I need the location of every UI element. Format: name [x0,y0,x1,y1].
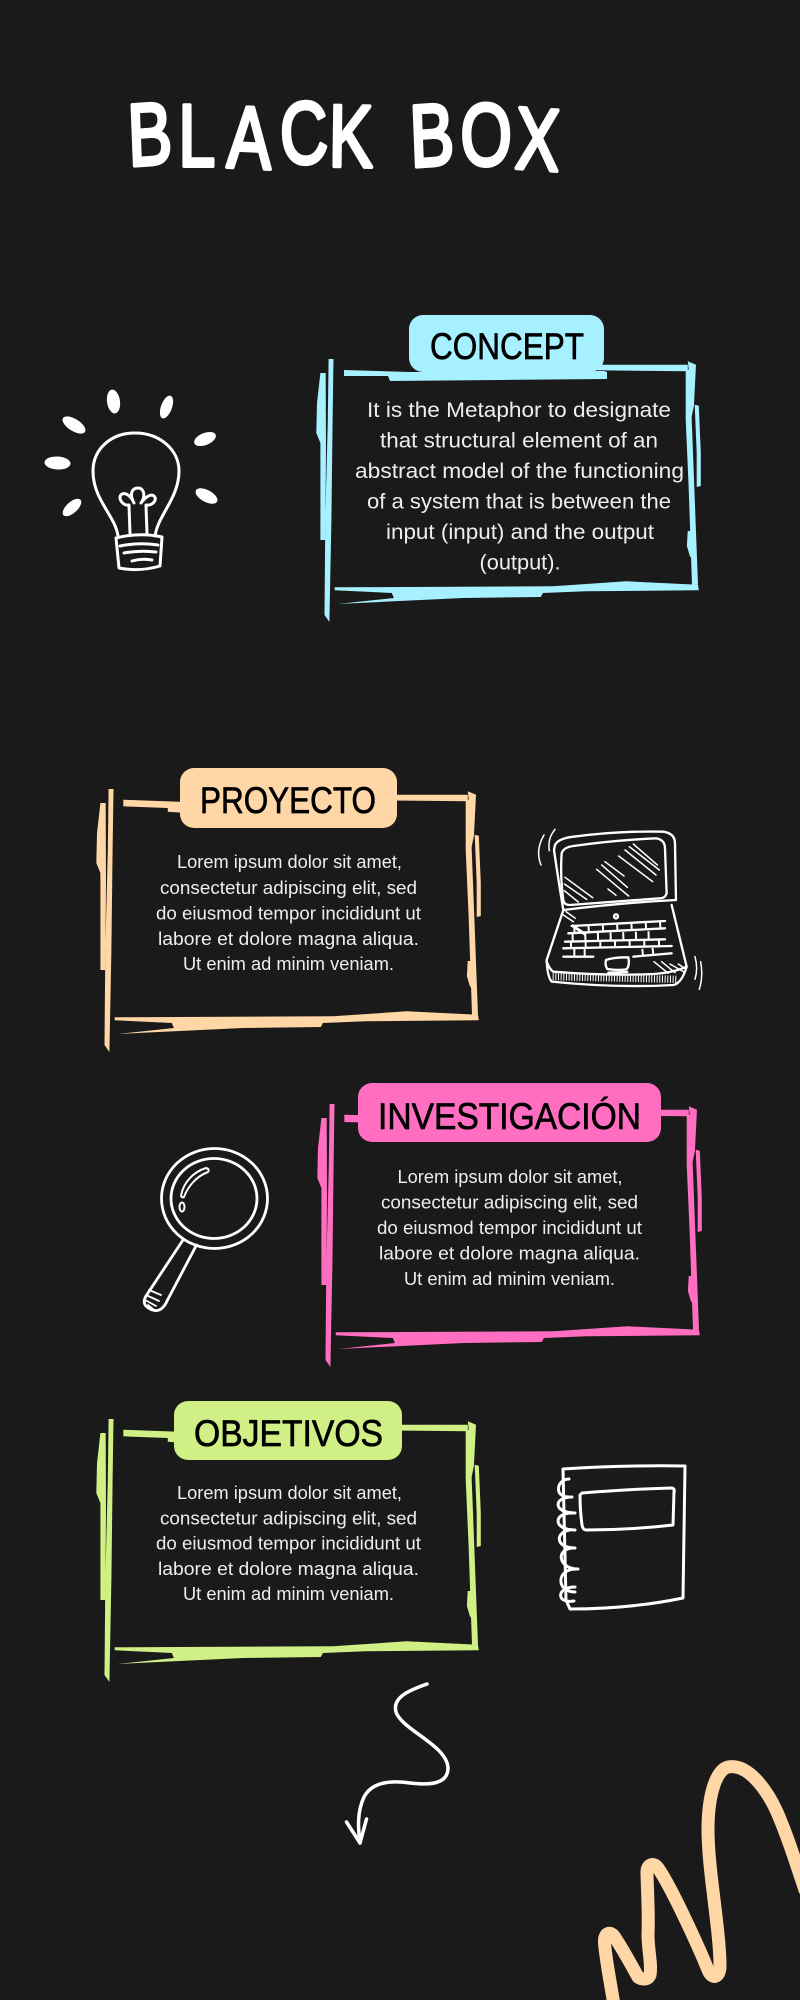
text block: objetivos: labore et dolore magna aliqua. [158,1559,419,1579]
text block: concept: input (input) and the output [386,521,654,544]
label: concept: CONCEPT [430,326,584,367]
icon: light bulb [44,389,220,570]
text block: concept: abstract model of the functioning [355,460,684,483]
text block: proyecto: labore et dolore magna aliqua. [158,929,419,949]
panel: objetivos [96,1401,685,1682]
text block: concept: that structural element of an [380,430,658,452]
text block: investigacion: Ut enim ad minim veniam. [404,1269,615,1289]
label: investigacion: INVESTIGACIÓN [378,1096,641,1137]
text block: investigacion: labore et dolore magna aliqua. [379,1244,640,1264]
label: proyecto: PROYECTO [200,780,376,821]
icon: notebook [558,1466,685,1609]
text block: concept [355,399,684,574]
arrow: squiggle pointing down [346,1684,448,1843]
frame: investigacion [317,1104,702,1367]
text block: proyecto [156,852,421,974]
text block: proyecto: Ut enim ad minim veniam. [183,954,394,974]
text block: proyecto: Lorem ipsum dolor sit amet, [177,852,402,872]
frame: concept [316,359,701,622]
icon: magnifying glass [144,1148,268,1311]
text block: objetivos: do eiusmod tempor incididunt ut [156,1534,421,1554]
icon: laptop [539,829,702,989]
label: concept [409,315,604,372]
frame: objetivos [96,1419,481,1682]
decoration: peach scribble [604,1767,800,2000]
text block: concept: of a system that is between the [367,490,671,514]
text block: proyecto: consectetur adipiscing elit, sed [160,878,417,898]
panel: concept [44,315,701,622]
text block: objetivos [156,1483,421,1604]
panel: proyecto [96,768,702,1052]
panel: investigacion [144,1083,702,1367]
text block: investigacion: Lorem ipsum dolor sit amet, [398,1167,622,1187]
frame: proyecto [96,789,481,1052]
title: BLACKBOX [126,84,562,190]
text block: proyecto: do eiusmod tempor incididunt ut [156,904,421,924]
text block: concept: It is the Metaphor to designate [367,399,671,422]
label: investigacion [358,1083,661,1142]
text block: investigacion [377,1167,642,1289]
text block: investigacion: do eiusmod tempor incididunt ut [377,1218,642,1238]
text block: objetivos: Ut enim ad minim veniam. [183,1584,394,1604]
text block: concept: (output). [480,552,560,574]
text block: objetivos: Lorem ipsum dolor sit amet, [177,1483,402,1503]
text block: objetivos: consectetur adipiscing elit, sed [160,1508,417,1528]
label: objetivos: OBJETIVOS [194,1413,383,1454]
label: objetivos [174,1401,402,1460]
label: proyecto [180,768,397,828]
text block: investigacion: consectetur adipiscing elit, sed [381,1192,638,1212]
